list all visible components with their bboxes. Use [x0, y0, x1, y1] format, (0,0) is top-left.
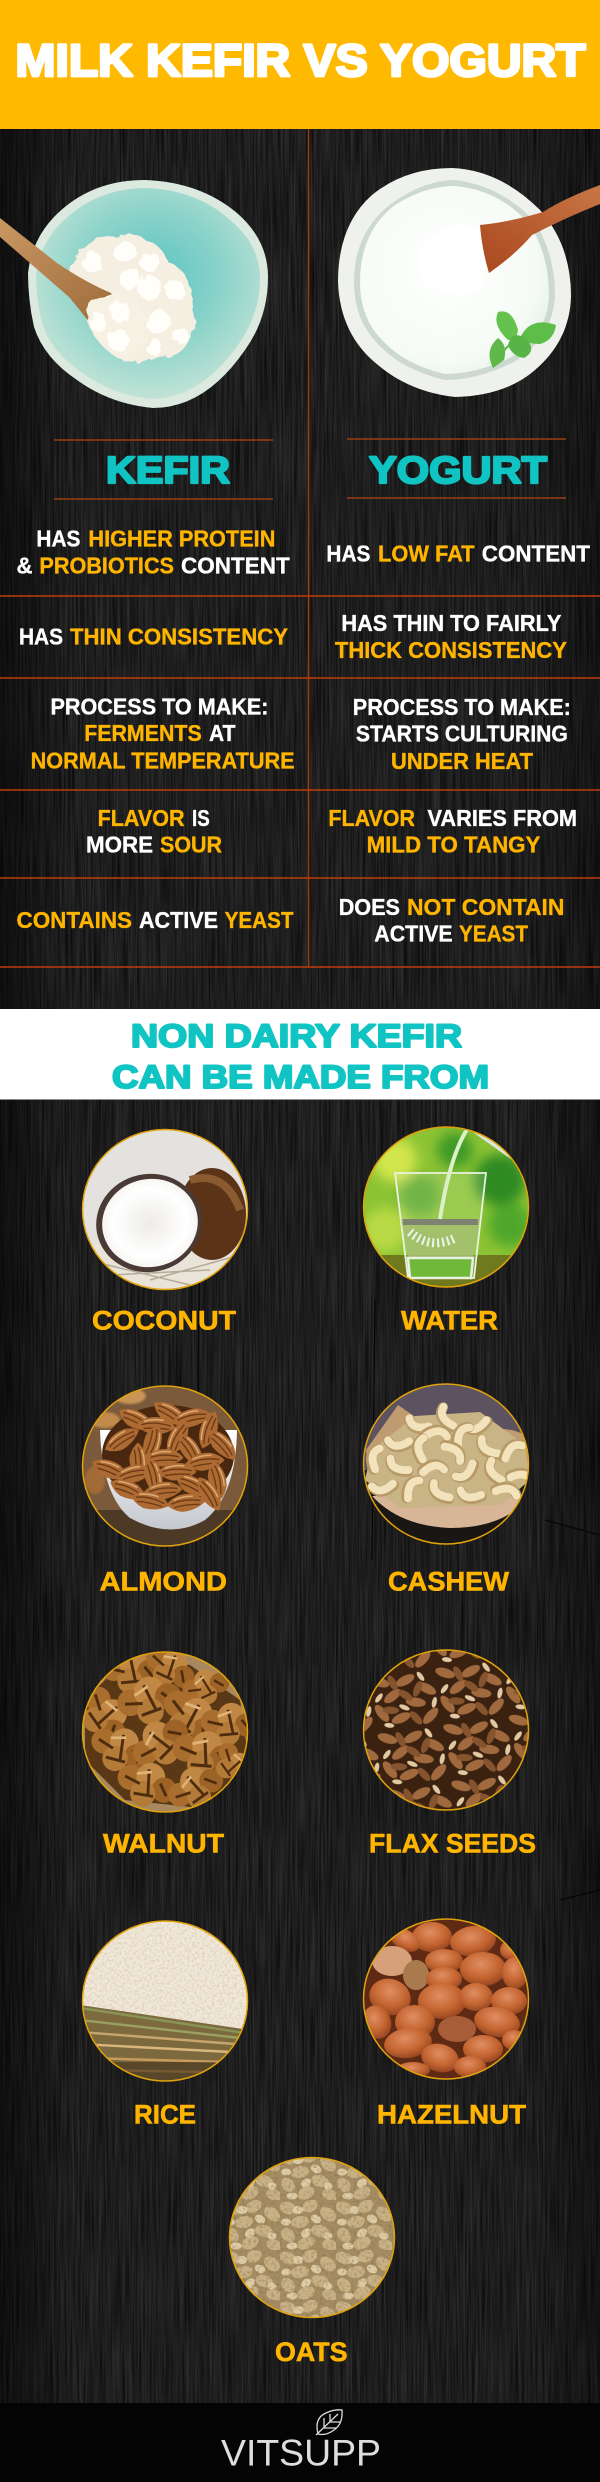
mint leaves	[489, 311, 556, 368]
label: coconut: COCONUT	[92, 1306, 237, 1336]
row 2 kefir: thin consistency: THIN CONSISTENCY	[70, 624, 288, 650]
panel: non dairy kefir heading band: CAN BE MADE FROM	[112, 1059, 489, 1095]
row 5 yogurt: yeast: YEAST	[459, 920, 528, 946]
row 1 kefir: protein and probiotics: HAS	[36, 526, 80, 552]
panel: kefir bowl photo	[0, 180, 268, 408]
label: cashew: CASHEW	[388, 1566, 510, 1596]
row 4 kefir: flavor: SOUR	[160, 832, 222, 858]
row 4 kefir: flavor: FLAVOR	[98, 805, 185, 831]
label: water: WATER	[401, 1306, 498, 1336]
icon: water glass photo	[360, 1125, 532, 1290]
icon: hazelnut photo	[358, 1915, 532, 2085]
row 4 yogurt: flavor: MILD TO TANGY	[367, 832, 540, 858]
row 3 yogurt: process: UNDER HEAT	[391, 748, 533, 774]
row 4 kefir: flavor	[86, 805, 222, 858]
row 1 yogurt: low fat: HAS	[326, 540, 370, 566]
row 1 kefir: protein and probiotics: HIGHER PROTEIN	[88, 526, 275, 552]
icon: oats photo	[228, 2155, 398, 2320]
row 3 kefir: process: AT	[209, 720, 235, 746]
label: walnut: WALNUT	[103, 1829, 225, 1859]
row 5 kefir: yeast: CONTAINS	[16, 907, 132, 933]
row 1 kefir: protein and probiotics	[16, 526, 290, 578]
label: almond: ALMOND	[100, 1566, 227, 1596]
row 5 yogurt: yeast: NOT CONTAIN	[407, 894, 564, 920]
row 3 kefir: process: PROCESS TO MAKE:	[50, 694, 268, 720]
row 5 yogurt: yeast	[339, 894, 564, 946]
row 1 yogurt: low fat: CONTENT	[482, 540, 590, 566]
row 2 kefir: thin consistency: HAS	[19, 624, 63, 650]
icon: flax seeds photo	[364, 1650, 528, 1810]
row 5 kefir: yeast: YEAST	[225, 907, 294, 933]
comparison table text	[16, 526, 590, 946]
panel: yogurt bowl photo	[338, 168, 600, 397]
row 3 kefir: process	[31, 694, 295, 774]
panel: non dairy kefir heading band: NON DAIRY KEFIR	[131, 1018, 462, 1054]
header banner	[0, 0, 600, 129]
heading: kefir: KEFIR	[106, 450, 230, 492]
wooden spoon	[480, 185, 600, 273]
row 1 yogurt: low fat: LOW FAT	[378, 540, 475, 566]
panel: non dairy kefir heading band	[0, 1009, 600, 1100]
row 4 kefir: flavor: IS	[192, 805, 210, 831]
row 5 yogurt: yeast: ACTIVE	[374, 920, 453, 946]
row 4 yogurt: flavor: FLAVOR	[328, 805, 415, 831]
row 3 yogurt: process	[353, 694, 571, 774]
row 3 kefir: process: FERMENTS	[84, 720, 202, 746]
icon: almond bowl photo	[80, 1382, 250, 1552]
row 5 yogurt: yeast: DOES	[339, 894, 400, 920]
footer bar	[0, 2403, 600, 2482]
row 4 yogurt: flavor	[328, 805, 577, 858]
icon: coconut photo	[80, 1125, 250, 1295]
icon: rice photo	[80, 1918, 250, 2085]
title: MILK KEFIR VS YOGURT	[16, 35, 586, 86]
icon: walnut photo	[82, 1651, 248, 1813]
row 4 yogurt: flavor: VARIES FROM	[428, 805, 577, 831]
icon: cashew plate photo	[360, 1380, 532, 1547]
row 3 kefir: process: NORMAL TEMPERATURE	[31, 748, 295, 774]
row 3 yogurt: process: PROCESS TO MAKE:	[353, 694, 571, 720]
row 1 kefir: protein and probiotics: CONTENT	[181, 552, 290, 578]
label: rice: RICE	[134, 2099, 196, 2129]
row 5 kefir: yeast: ACTIVE	[139, 907, 218, 933]
kefir curds	[69, 234, 194, 362]
label: oats: OATS	[275, 2337, 348, 2367]
icon: leaf logo	[316, 2410, 342, 2435]
row 1 kefir: protein and probiotics: PROBIOTICS	[39, 552, 174, 578]
row 3 yogurt: process: STARTS CULTURING	[356, 721, 568, 747]
label: flax seeds: FLAX SEEDS	[369, 1829, 536, 1859]
label: hazelnut: HAZELNUT	[377, 2099, 527, 2129]
row 1 kefir: protein and probiotics: &	[16, 552, 32, 578]
logo wordmark: VITSUPP	[221, 2432, 381, 2474]
row 4 kefir: flavor: MORE	[86, 832, 153, 858]
heading: yogurt: YOGURT	[369, 450, 547, 492]
column and row dividers	[0, 129, 600, 967]
kefir curds on the spoon	[87, 294, 147, 362]
row 2 yogurt: thin to thick: THICK CONSISTENCY	[335, 637, 567, 663]
wooden spoon	[0, 218, 122, 324]
row 2 yogurt: thin to thick	[335, 610, 567, 663]
row 2 yogurt: thin to thick: HAS THIN TO FAIRLY	[341, 610, 561, 636]
